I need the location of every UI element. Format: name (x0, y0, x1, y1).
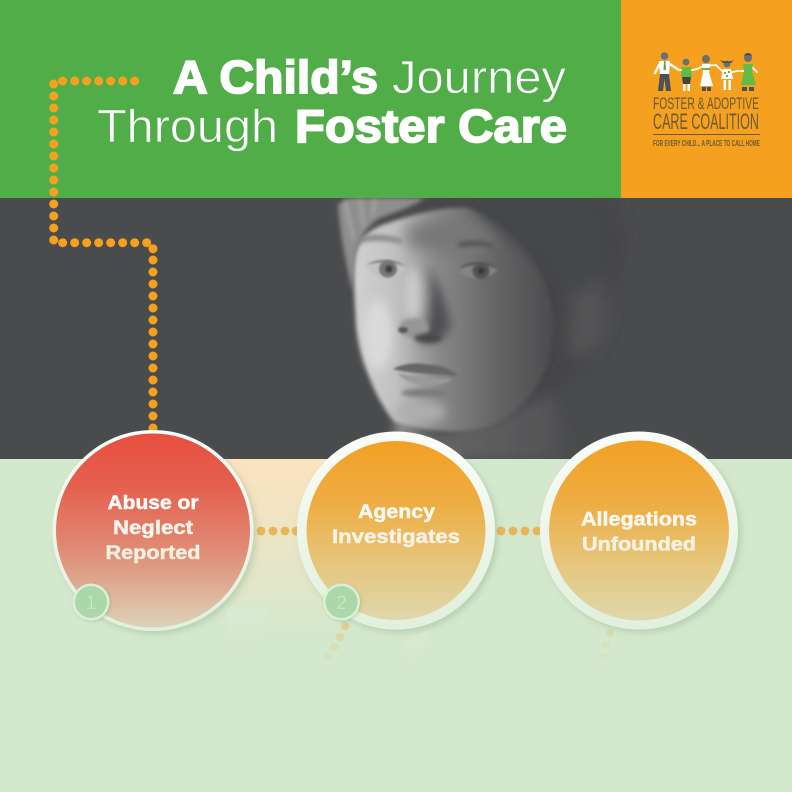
step 3: Allegations Unfounded: Unfounded (582, 534, 696, 556)
step 3: Allegations Unfounded: Allegations (581, 510, 697, 530)
pale green lower background (0, 459, 792, 792)
badge: number 2: 2 (336, 593, 347, 614)
faint trail shape below circles (225, 606, 432, 668)
fading dots below step 2 (324, 622, 349, 661)
logo wordmark (653, 94, 760, 148)
step 2: Agency Investigates (297, 432, 495, 630)
step 2: Agency Investigates: Agency (358, 502, 435, 523)
badge: number 1: 1 (86, 593, 96, 614)
title: Foster Care (295, 100, 567, 152)
title: Through (97, 100, 278, 152)
logo panel: orange block (621, 0, 792, 198)
badge: number 2 (323, 584, 360, 620)
title: A Child’s (173, 51, 378, 103)
step 1: Abuse or Neglect Reported: Abuse or (108, 493, 199, 514)
beige connector panel behind circles (223, 459, 335, 640)
step 1: Abuse or Neglect Reported: Neglect (113, 518, 194, 539)
step 3: Allegations Unfounded (540, 432, 738, 630)
logo: Foster and Adoptive Care Coalition (653, 52, 760, 148)
photo band: boy's portrait on dark background (0, 198, 792, 459)
header band: green title panel (0, 0, 621, 198)
dotted connector: step 1 to step 2 (257, 527, 300, 535)
title (97, 51, 567, 152)
icon: family holding hands (655, 52, 757, 91)
dotted connector: step 2 to step 3 (497, 527, 541, 535)
step 2: Agency Investigates: Investigates (332, 527, 460, 548)
badge: number 1 (72, 584, 110, 620)
dotted route from title to first step (49, 76, 158, 432)
fading dots below step 3 (600, 629, 614, 661)
title: Journey (392, 51, 566, 103)
step 1: Abuse or Neglect Reported: Reported (106, 543, 200, 564)
step 1: Abuse or Neglect Reported (52, 430, 254, 631)
